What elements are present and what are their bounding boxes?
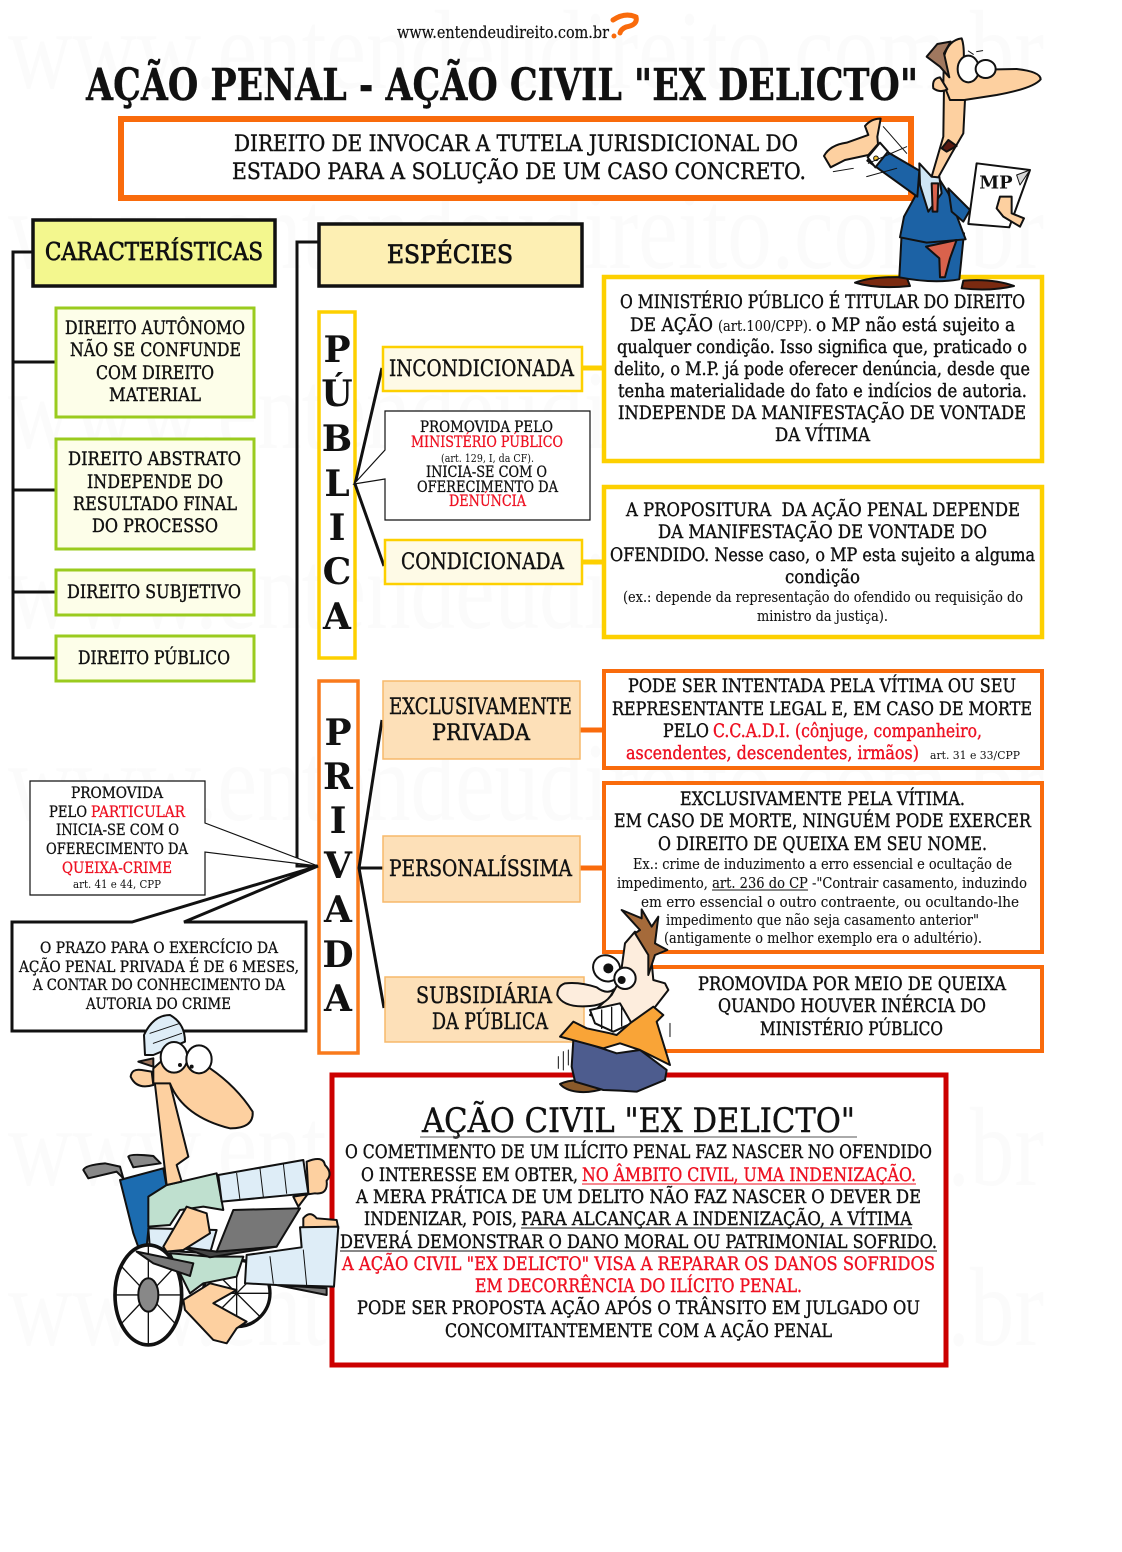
tag: condicionada bbox=[385, 540, 582, 584]
panel: subsidiária description: QUANDO HOUVER INÉRCIA DO bbox=[718, 994, 986, 1017]
icon: man with MP document bbox=[824, 38, 1041, 290]
panel: ação civil ex delicto: CONCOMITANTEMENTE COM A AÇÃO PENAL bbox=[445, 1320, 832, 1342]
vertical label: privada: A bbox=[323, 978, 353, 1020]
callout: particular: QUEIXA-CRIME bbox=[62, 859, 172, 877]
callout: particular: art. 41 e 44, CPP bbox=[73, 877, 161, 891]
callout: prazo: AUTORIA DO CRIME bbox=[85, 995, 231, 1013]
panel: exclusivamente privada description: ascendentes, descendentes, irmãos) bbox=[626, 742, 919, 764]
panel: exclusivamente privada description: REPRESENTANTE LEGAL E, EM CASO DE MORTE bbox=[612, 698, 1032, 720]
panel: condicionada description: OFENDIDO. Nesse caso, o MP esta sujeito a alguma bbox=[610, 544, 1035, 566]
callout: particular: PROMOVIDA bbox=[71, 784, 164, 802]
panel: exclusivamente privada description: PELO bbox=[663, 720, 709, 742]
panel: direito público: DIREITO PÚBLICO bbox=[78, 646, 230, 669]
panel: incondicionada description: INDEPENDE DA MANIFESTAÇÃO DE VONTADE bbox=[618, 402, 1026, 424]
panel: definition: DIREITO DE INVOCAR A TUTELA JURISDICIONAL DO bbox=[234, 132, 798, 157]
callout: prazo bbox=[12, 866, 318, 1031]
panel: condicionada description: DA MANIFESTAÇÃO DE VONTADE DO bbox=[658, 521, 987, 543]
heading: características: CARACTERÍSTICAS bbox=[45, 237, 263, 266]
vertical label: pública: L bbox=[324, 463, 350, 505]
vertical label: privada: I bbox=[330, 800, 346, 842]
panel: exclusivamente privada description bbox=[604, 671, 1042, 768]
panel: direito autônomo: COM DIREITO bbox=[96, 362, 214, 384]
vertical label: pública bbox=[319, 312, 355, 658]
callout: ministério público: PROMOVIDA PELO bbox=[420, 418, 553, 436]
callout: particular: OFERECIMENTO DA bbox=[46, 840, 189, 858]
panel: ação civil ex delicto: O COMETIMENTO DE UM ILÍCITO PENAL FAZ NASCER NO OFENDIDO bbox=[345, 1140, 932, 1163]
panel: incondicionada description: DA VÍTIMA bbox=[775, 423, 870, 446]
vertical label: privada: P bbox=[324, 712, 352, 754]
callout: ministério público bbox=[354, 411, 590, 520]
panel: ação civil ex delicto: O INTERESSE EM OBTER, bbox=[361, 1164, 578, 1186]
panel: direito subjetivo bbox=[56, 570, 254, 615]
callout: prazo: O PRAZO PARA O EXERCÍCIO DA bbox=[40, 939, 279, 957]
tag: exclusivamente privada: PRIVADA bbox=[432, 721, 531, 746]
panel: ação civil ex delicto: DEVERÁ DEMONSTRAR O DANO MORAL OU PATRIMONIAL SOFRIDO. bbox=[340, 1230, 937, 1253]
panel: incondicionada description bbox=[604, 277, 1042, 461]
panel: ação civil ex delicto: NO ÂMBITO CIVIL, UMA INDENIZAÇÃO. bbox=[582, 1163, 916, 1186]
panel: condicionada description: A PROPOSITURA DA AÇÃO PENAL DEPENDE bbox=[625, 499, 1020, 521]
panel: exclusivamente privada description: PODE SER INTENTADA PELA VÍTIMA OU SEU bbox=[628, 674, 1016, 697]
panel: condicionada description: condição bbox=[785, 566, 860, 588]
website url bbox=[397, 15, 636, 43]
panel: ação civil ex delicto: INDENIZAR, POIS, bbox=[364, 1208, 517, 1230]
panel: personalíssima description: impedimento que não seja casamento anterior" bbox=[666, 911, 979, 929]
vertical label: pública: Ú bbox=[321, 373, 353, 415]
panel: direito autônomo: MATERIAL bbox=[109, 384, 201, 406]
panel: subsidiária description: PROMOVIDA POR MEIO DE QUEIXA bbox=[698, 973, 1006, 995]
title: AÇÃO PENAL - AÇÃO CIVIL "EX DELICTO" bbox=[85, 58, 918, 111]
heading: espécies bbox=[319, 224, 582, 286]
panel: ação civil ex delicto: A MERA PRÁTICA DE UM DELITO NÃO FAZ NASCER O DEVER DE bbox=[355, 1185, 921, 1208]
panel: direito abstrato bbox=[56, 439, 254, 549]
vertical label: pública: B bbox=[322, 418, 352, 460]
panel: direito abstrato: DIREITO ABSTRATO bbox=[68, 448, 241, 470]
panel: ação civil ex delicto: AÇÃO CIVIL "EX DELICTO" bbox=[421, 1101, 855, 1141]
callout: prazo: A CONTAR DO CONHECIMENTO DA bbox=[32, 976, 286, 994]
panel: exclusivamente privada description: C.C.A.D.I. (cônjuge, companheiro, bbox=[713, 720, 982, 742]
panel: direito abstrato: DO PROCESSO bbox=[92, 515, 218, 537]
panel: ação civil ex delicto: PODE SER PROPOSTA AÇÃO APÓS O TRÂNSITO EM JULGADO OU bbox=[357, 1296, 920, 1319]
panel: direito autônomo: NÃO SE CONFUNDE bbox=[70, 339, 241, 361]
tag: subsidiária da pública: DA PÚBLICA bbox=[432, 1008, 549, 1035]
vertical label: privada: A bbox=[323, 889, 353, 931]
panel: direito autônomo bbox=[56, 308, 254, 417]
tag: exclusivamente privada: EXCLUSIVAMENTE bbox=[389, 695, 572, 720]
panel: direito público bbox=[56, 636, 254, 681]
vertical label: privada: R bbox=[323, 756, 354, 798]
panel: definition: ESTADO PARA A SOLUÇÃO DE UM CASO CONCRETO. bbox=[232, 157, 806, 185]
panel: personalíssima description: EM CASO DE MORTE, NINGUÉM PODE EXERCER bbox=[614, 809, 1032, 832]
callout: ministério público: MINISTÉRIO PÚBLICO bbox=[411, 433, 563, 451]
callout: ministério público: INICIA-SE COM O bbox=[426, 463, 547, 481]
icon: man with MP document: MP bbox=[979, 173, 1013, 193]
callout: particular bbox=[30, 781, 318, 895]
callout: ministério público: DENÚNCIA bbox=[449, 492, 527, 510]
vertical label: privada bbox=[319, 681, 358, 1053]
panel: incondicionada description: o MP não está sujeito a bbox=[816, 314, 1015, 336]
vertical label: privada: V bbox=[323, 845, 353, 887]
panel: personalíssima description: impedimento, art. 236 do CP -"Contrair casamento, induzindo bbox=[617, 874, 1027, 892]
panel: direito subjetivo: DIREITO SUBJETIVO bbox=[67, 581, 241, 603]
tag: exclusivamente privada bbox=[383, 681, 580, 759]
tag: subsidiária da pública bbox=[385, 977, 584, 1042]
panel: subsidiária description bbox=[650, 967, 1042, 1051]
panel: incondicionada description: (art.100/CPP). bbox=[718, 317, 812, 335]
callout: particular: INICIA-SE COM O bbox=[56, 821, 179, 839]
heading: espécies: ESPÉCIES bbox=[387, 240, 513, 269]
panel: incondicionada description: tenha materialidade do fato e indícios de autoria. bbox=[618, 380, 1027, 402]
panel: exclusivamente privada description: art. 31 e 33/CPP bbox=[930, 748, 1020, 762]
panel: ação civil ex delicto: EM DECORRÊNCIA DO ILÍCITO PENAL. bbox=[475, 1274, 802, 1297]
tag: subsidiária da pública: SUBSIDIÁRIA bbox=[416, 982, 553, 1009]
callout: ministério público: (art. 129, I, da CF). bbox=[441, 451, 534, 465]
panel: personalíssima description: EXCLUSIVAMENTE PELA VÍTIMA. bbox=[680, 787, 965, 810]
vertical label: pública: I bbox=[329, 507, 345, 549]
vertical label: pública: A bbox=[322, 596, 352, 638]
panel: condicionada description: (ex.: depende da representação do ofendido ou requisição do bbox=[623, 588, 1023, 606]
icon: injured man in wheelchair bbox=[83, 1015, 338, 1345]
tag: incondicionada: INCONDICIONADA bbox=[389, 357, 575, 382]
panel: condicionada description: ministro da justiça). bbox=[757, 607, 888, 625]
branch lines bbox=[355, 368, 384, 1008]
tag: incondicionada bbox=[383, 347, 582, 391]
callout: particular: PARTICULAR bbox=[91, 803, 186, 821]
panel: personalíssima description: Ex.: crime de induzimento a erro essencial e ocultação de bbox=[633, 855, 1012, 873]
vertical label: pública: C bbox=[323, 551, 351, 593]
panel: incondicionada description: O MINISTÉRIO PÚBLICO É TITULAR DO DIREITO bbox=[620, 290, 1025, 313]
heading: características bbox=[33, 220, 275, 286]
panel: ação civil ex delicto: PARA ALCANÇAR A INDENIZAÇÃO, A VÍTIMA bbox=[521, 1207, 912, 1230]
callout: particular: PELO bbox=[49, 803, 87, 821]
vertical label: pública: P bbox=[323, 329, 351, 371]
panel: personalíssima description: (antigamente o melhor exemplo era o adultério). bbox=[664, 929, 982, 947]
panel: direito autônomo: DIREITO AUTÔNOMO bbox=[65, 316, 245, 339]
panel: incondicionada description: delito, o M.P. já pode oferecer denúncia, desde que bbox=[614, 358, 1030, 380]
vertical label: privada: D bbox=[322, 934, 354, 976]
panel: personalíssima description bbox=[604, 783, 1042, 952]
panel: personalíssima description: em erro essencial o outro contraente, ou ocultando-lhe bbox=[641, 893, 1019, 911]
icon: worried man sitting bbox=[557, 909, 670, 1092]
panel: subsidiária description: MINISTÉRIO PÚBLICO bbox=[760, 1017, 943, 1040]
panel: incondicionada description: DE AÇÃO bbox=[630, 314, 713, 336]
tag: condicionada: CONDICIONADA bbox=[401, 550, 565, 575]
panel: direito abstrato: RESULTADO FINAL bbox=[73, 493, 237, 515]
website url: www.entendeudireito.com.br bbox=[397, 23, 610, 43]
panel: condicionada description bbox=[604, 487, 1042, 637]
panel: direito abstrato: INDEPENDE DO bbox=[87, 471, 223, 493]
connector lines bbox=[13, 242, 319, 866]
callout: ministério público: OFERECIMENTO DA bbox=[417, 478, 559, 496]
panel: personalíssima description: O DIREITO DE QUEIXA EM SEU NOME. bbox=[658, 833, 987, 855]
panel: incondicionada description: qualquer condição. Isso significa que, praticado o bbox=[617, 336, 1027, 358]
tag: personalíssima bbox=[383, 836, 580, 902]
tag: personalíssima: PERSONALÍSSIMA bbox=[389, 855, 573, 882]
panel: definition bbox=[121, 119, 911, 198]
panel: ação civil ex delicto: A AÇÃO CIVIL "EX DELICTO" VISA A REPARAR OS DANOS SOFRIDOS bbox=[341, 1253, 935, 1275]
callout: prazo: AÇÃO PENAL PRIVADA É DE 6 MESES, bbox=[18, 958, 299, 976]
panel: ação civil ex delicto bbox=[332, 1075, 946, 1365]
